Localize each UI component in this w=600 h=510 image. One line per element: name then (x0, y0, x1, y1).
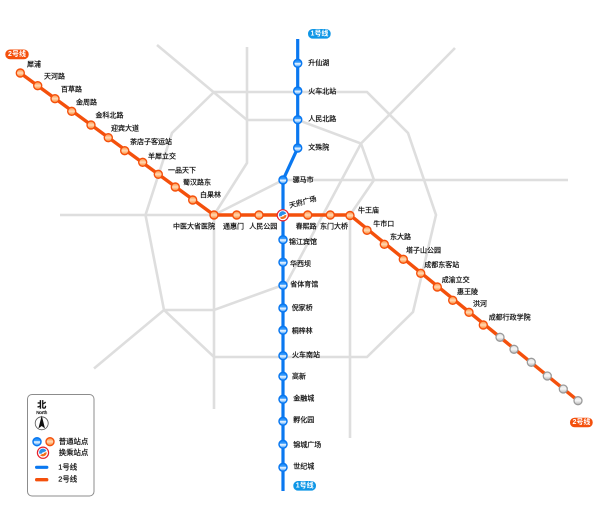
station: 成都行政学院 (479, 312, 531, 329)
north heading: 北 (37, 399, 46, 410)
station: 迎宾大道 (104, 124, 139, 142)
station: 成渝立交: 成渝立交 (442, 275, 470, 284)
station: 火车南站 (279, 350, 320, 360)
station: 洪河: 洪河 (473, 299, 487, 308)
station: 通惠门 (223, 211, 244, 230)
station: 倪家桥 (279, 303, 313, 312)
station: 中医大省医院 (173, 211, 218, 230)
station: 人民北路: 人民北路 (308, 114, 336, 123)
badge: line 2 bottom: 2号线 (572, 417, 590, 426)
station: 百草路 (51, 84, 82, 103)
station: 人民公园 (249, 211, 277, 230)
station: 人民公园: 人民公园 (249, 222, 277, 230)
station: 孵化园 (279, 415, 314, 425)
station: 锦城广场: 锦城广场 (293, 440, 321, 449)
station: 金融城: 金融城 (293, 394, 314, 402)
station: 金周路 (68, 98, 97, 115)
station: 白果林 (189, 190, 221, 204)
station: 白果林: 白果林 (200, 190, 221, 199)
station: 文殊院 (294, 142, 329, 152)
badge: line 2 top (5, 49, 29, 59)
line 2 track (20, 73, 578, 401)
icon: compass (35, 416, 48, 430)
badge: line 1 bottom (293, 480, 316, 491)
station: 金科北路 (87, 110, 124, 129)
planned stations, unnamed (496, 333, 582, 405)
station: 东大路 (380, 232, 411, 248)
station: 省体育馆 (279, 280, 318, 289)
station: 茶店子客运站 (121, 137, 172, 155)
station: 火车北站: 火车北站 (308, 86, 336, 96)
station: 华西坝 (279, 258, 311, 268)
station: 惠王陵: 惠王陵 (457, 287, 478, 296)
legend: line 2: 2号线 (58, 474, 78, 484)
line 2 stations (16, 60, 582, 405)
station: 春熙路 (296, 211, 317, 230)
station: 羊犀立交: 羊犀立交 (148, 152, 176, 160)
station: 塔子山公园 (399, 246, 441, 263)
station: 成都行政学院: 成都行政学院 (489, 312, 531, 322)
station: 蜀汉路东 (171, 178, 211, 191)
station: 百草路: 百草路 (61, 84, 82, 94)
station: 一品天下: 一品天下 (168, 166, 196, 174)
station: 金科北路: 金科北路 (96, 110, 124, 120)
badge: line 1 top: 1号线 (310, 28, 328, 37)
station: 锦城广场 (279, 440, 321, 449)
station: 高新: 高新 (292, 372, 306, 380)
station: 升仙湖 (294, 58, 329, 67)
station: 骡马市: 骡马市 (293, 175, 314, 184)
station: 成都东客站 (417, 260, 459, 277)
station: 中医大省医院: 中医大省医院 (173, 222, 215, 230)
line 1 track (283, 39, 298, 491)
station: 迎宾大道: 迎宾大道 (111, 124, 139, 132)
interchange station: 天府广场: 天府广场 (288, 194, 317, 210)
station: 孵化园: 孵化园 (293, 415, 314, 424)
station: 羊犀立交 (139, 152, 176, 166)
interchange station: 天府广场 (277, 194, 317, 221)
badge: line 2 bottom (570, 417, 593, 427)
badge: line 2 top: 2号线 (8, 49, 26, 58)
station: 金融城 (279, 394, 314, 403)
station: 升仙湖: 升仙湖 (308, 58, 329, 67)
station: 火车北站 (294, 86, 336, 96)
station: 东门大桥: 东门大桥 (320, 222, 348, 230)
legend: regular station: 普通站点 (59, 437, 89, 446)
station: 省体育馆: 省体育馆 (290, 280, 318, 288)
station: 人民北路 (294, 114, 336, 124)
station: 华西坝: 华西坝 (290, 259, 311, 268)
station: 文殊院: 文殊院 (308, 142, 329, 152)
station: 桐梓林: 桐梓林 (292, 326, 313, 335)
station: 锦江宾馆 (279, 236, 317, 246)
station: 牛市口: 牛市口 (373, 219, 394, 228)
station: 惠王陵 (449, 287, 478, 304)
station: 牛市口 (363, 219, 394, 234)
station: 天河路 (34, 72, 65, 90)
station: 春熙路: 春熙路 (296, 222, 317, 230)
station: 犀浦 (16, 60, 41, 77)
station: 成渝立交 (433, 275, 470, 291)
station: 犀浦: 犀浦 (27, 60, 41, 68)
station: 倪家桥: 倪家桥 (292, 303, 313, 312)
badge: line 1 bottom: 1号线 (296, 480, 314, 489)
line 1 stations (279, 58, 336, 471)
station: 成都东客站: 成都东客站 (424, 260, 459, 269)
station: 牛王庙 (346, 206, 379, 220)
station: 世纪城 (279, 462, 314, 471)
legend panel (28, 394, 94, 496)
station: 牛王庙: 牛王庙 (358, 206, 379, 214)
station: 世纪城: 世纪城 (293, 462, 314, 470)
station: 天河路: 天河路 (44, 72, 65, 80)
station: 通惠门: 通惠门 (223, 222, 244, 230)
station: 茶店子客运站: 茶店子客运站 (130, 137, 172, 146)
badge: line 1 top (308, 28, 331, 39)
station: 塔子山公园: 塔子山公园 (406, 246, 441, 254)
station: 骡马市 (279, 175, 314, 184)
station: 桐梓林 (279, 326, 313, 335)
station: 一品天下 (154, 166, 196, 178)
station: 金周路: 金周路 (76, 98, 97, 106)
station: 东大路: 东大路 (390, 232, 411, 241)
legend: interchange station: 换乘站点 (59, 448, 89, 457)
legend: line 1: 1号线 (58, 462, 78, 472)
station: 洪河 (465, 299, 487, 316)
station: 高新 (279, 372, 306, 380)
background road network (60, 45, 568, 438)
station: 东门大桥 (320, 211, 348, 230)
north caption: North (36, 410, 48, 415)
station: 火车南站: 火车南站 (292, 350, 320, 359)
station: 蜀汉路东: 蜀汉路东 (183, 178, 211, 186)
station: 锦江宾馆: 锦江宾馆 (289, 237, 317, 246)
